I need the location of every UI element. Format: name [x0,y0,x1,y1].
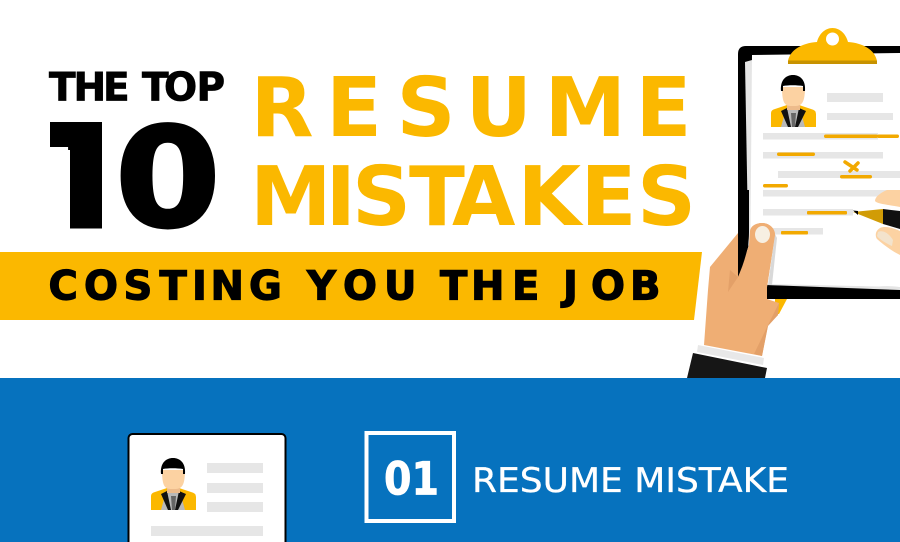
section label: RESUME MISTAKE [472,461,789,501]
heading: THE TOP: THE TOP [49,66,225,110]
banner: costing you the job [0,252,702,320]
resume text lines [763,93,900,234]
heading: 10 [50,122,215,230]
pen [853,209,900,229]
shirt cuff [697,345,764,365]
heading: MISTAKES: MISTAKES [250,150,696,245]
card text lines [151,463,263,536]
thumbnail [755,226,770,243]
resume card [128,434,286,542]
paper shadow sheet [745,60,756,285]
heading: 10: 1 [29,100,125,261]
number badge: 01 [384,452,439,506]
orange correction marks [763,134,899,234]
jacket sleeve [687,353,767,378]
number badge [366,433,454,521]
clipboard board [738,46,900,277]
holding hand [704,190,779,356]
banner: costing you the job: COSTING YOU THE JOB [48,264,660,310]
blue section [0,378,900,542]
paper sheet [750,53,900,287]
clipboard clip [788,28,877,64]
heading: RESUME: RESUME [250,61,692,156]
card portrait [151,458,196,510]
gold tab under hand [775,299,787,314]
resume portrait [771,75,816,127]
title block [48,70,690,230]
writing hand fingers [875,190,900,255]
illustration: hands holding clipboard [687,28,900,378]
heading: 10: 0 [115,99,221,259]
